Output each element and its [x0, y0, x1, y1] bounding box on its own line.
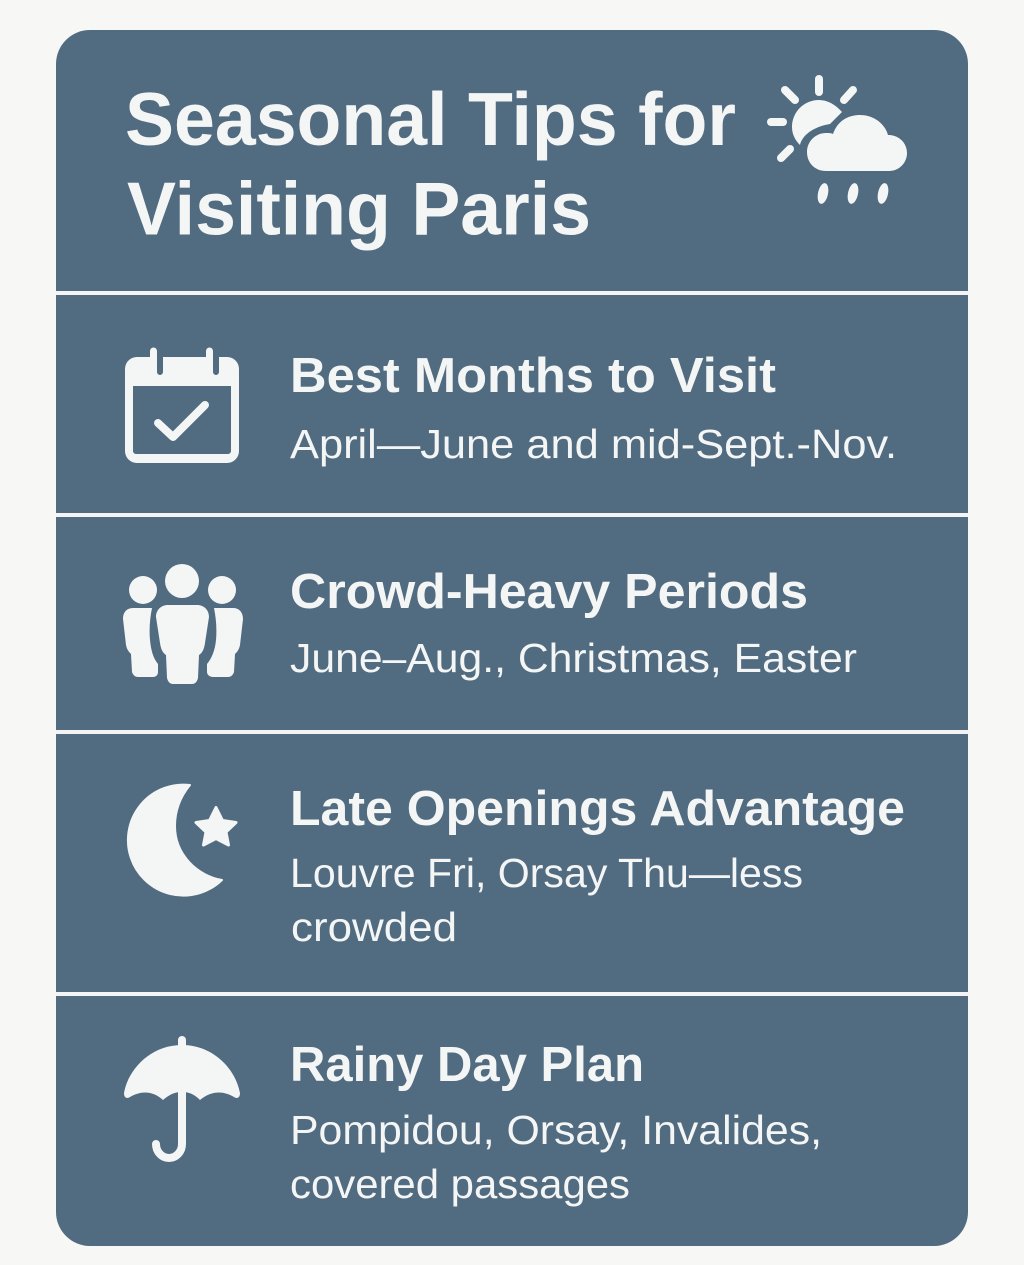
section: best months text	[290, 349, 897, 467]
section: crowd-heavy periods text: Crowd-Heavy Periods	[290, 565, 808, 619]
icon: sun and cloud with rain	[771, 79, 907, 205]
title	[125, 77, 736, 250]
icon: group of people	[123, 564, 243, 684]
section: crowd-heavy periods text	[290, 565, 857, 681]
section: best months text: April—June and mid-Sept.-Nov.	[290, 421, 897, 467]
title: Visiting Paris	[127, 166, 591, 250]
section: rainy day text: covered passages	[290, 1161, 630, 1207]
icon: crescent moon and star	[128, 785, 236, 896]
section: best months text: Best Months to Visit	[290, 349, 776, 403]
icon: calendar	[125, 351, 239, 463]
section: late openings text: Louvre Fri, Orsay Thu—less	[290, 850, 803, 896]
section: late openings text: crowded	[291, 904, 457, 950]
section: crowd-heavy periods text: June–Aug., Christmas, Easter	[290, 635, 857, 681]
section: rainy day text	[290, 1038, 822, 1207]
section: rainy day text: Rainy Day Plan	[290, 1038, 644, 1092]
title: Seasonal Tips for	[125, 77, 736, 161]
section: rainy day text: Pompidou, Orsay, Invalides,	[290, 1107, 822, 1153]
section: late openings text: Late Openings Advantage	[290, 782, 905, 836]
icon: umbrella	[124, 1040, 240, 1158]
section: late openings text	[290, 782, 905, 950]
